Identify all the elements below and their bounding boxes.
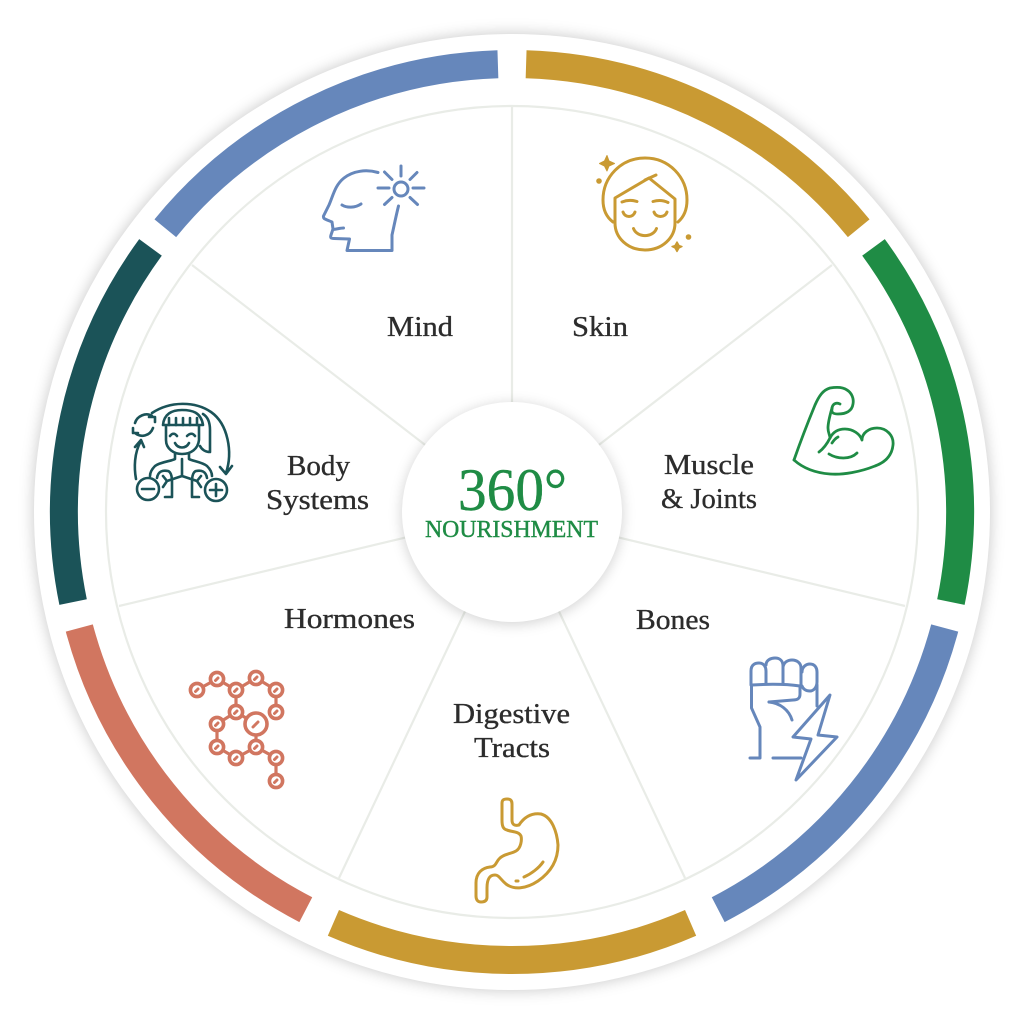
inner wheel with spokes <box>106 106 918 918</box>
hub heading: 360 degrees: 360° <box>458 457 567 523</box>
label: Digestive Tracts: Digestive <box>453 699 570 730</box>
label: Hormones: Hormones <box>284 604 415 635</box>
icon: head with sun (mind) <box>323 166 424 250</box>
ring segment: bones <box>718 628 945 910</box>
label: Body Systems: Systems <box>266 485 369 516</box>
centre hub <box>401 402 623 625</box>
icon: person with body cycle (body systems) <box>133 404 232 501</box>
ring segment: mind <box>165 64 498 228</box>
label: Body Systems <box>266 451 369 516</box>
icon: molecule chain (hormones) <box>190 671 283 788</box>
label: Bones: Bones <box>636 605 710 636</box>
hub subheading: nourishment: NOURISHMENT <box>425 517 598 543</box>
ring segment: digestive tracts <box>333 923 691 960</box>
ring segment: muscle and joints <box>874 247 960 602</box>
ring segment: skin <box>526 64 859 228</box>
label: Muscle and Joints: Muscle <box>664 450 754 481</box>
ring segment: hormones <box>79 628 306 910</box>
label: Mind: Mind <box>387 312 453 343</box>
icon: stomach (digestive tracts) <box>476 799 558 902</box>
label: Muscle and Joints: & Joints <box>661 484 757 515</box>
label: Muscle and Joints <box>661 450 757 515</box>
ring segment: body systems <box>64 247 150 602</box>
coloured outer ring segments <box>64 64 960 960</box>
label: Digestive Tracts: Tracts <box>474 733 550 764</box>
label: Digestive Tracts <box>453 699 570 764</box>
icon: fist with lightning bolt (bones) <box>750 658 837 780</box>
icon: flexed arm (muscle and joints) <box>794 387 893 474</box>
label: Body Systems: Body <box>287 451 350 482</box>
icon: face with towel (skin) <box>598 156 690 252</box>
label: Skin: Skin <box>572 312 628 343</box>
